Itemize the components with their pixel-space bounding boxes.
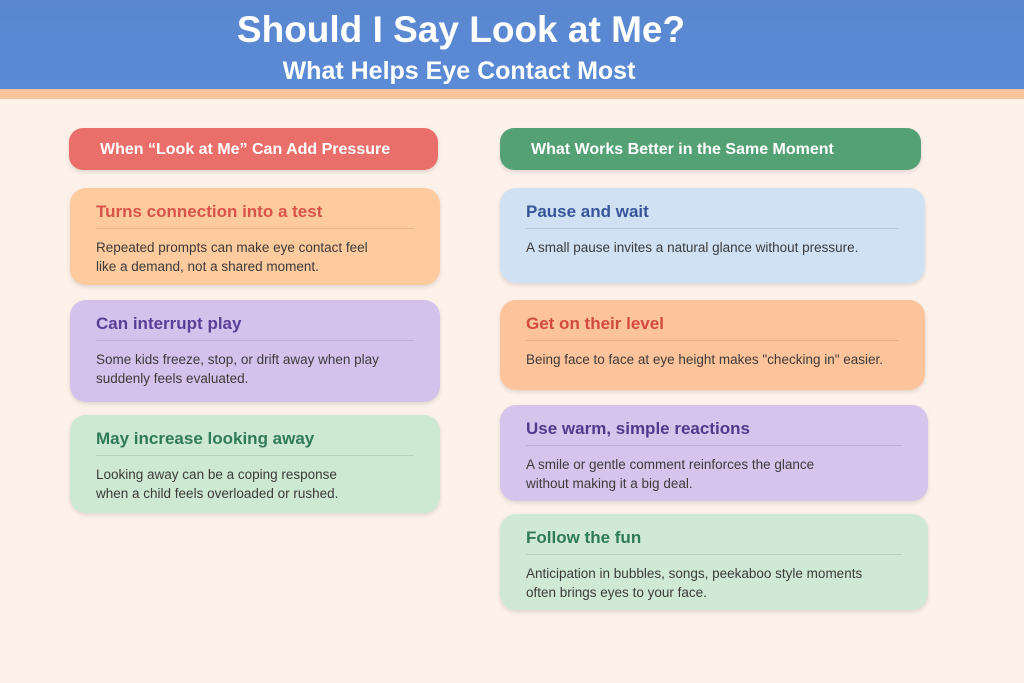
card: warm simple reactions: Use warm, simple reactions: [526, 419, 750, 438]
pill: right heading: What Works Better in the Same Moment: [531, 141, 834, 158]
card: can interrupt play: suddenly feels evaluated.: [96, 371, 248, 386]
card: may increase looking away: May increase looking away: [96, 429, 314, 448]
card: can interrupt play: [70, 300, 440, 402]
card: turns connection into a test: Repeated prompts can make eye contact feel: [96, 240, 368, 255]
card: may increase looking away: [70, 415, 440, 513]
card: pause and wait: Pause and wait: [526, 202, 649, 221]
card: can interrupt play: Some kids freeze, stop, or drift away when play: [96, 352, 379, 367]
card: turns connection into a test: like a demand, not a shared moment.: [96, 259, 319, 274]
card: follow the fun: Anticipation in bubbles, songs, peekaboo style moments: [526, 566, 862, 581]
card: follow the fun: [500, 514, 928, 610]
card: follow the fun: often brings eyes to your face.: [526, 585, 707, 600]
pill: left heading: [69, 128, 438, 170]
card: turns connection into a test: Turns connection into a test: [96, 202, 322, 221]
card: may increase looking away: when a child feels overloaded or rushed.: [96, 486, 338, 501]
pill: right heading: [500, 128, 921, 170]
card: follow the fun: Follow the fun: [526, 528, 641, 547]
card: pause and wait: [500, 188, 925, 283]
subtitle: What Helps Eye Contact Most: [283, 57, 635, 85]
card: get on their level: Get on their level: [526, 314, 664, 333]
card: warm simple reactions: without making it a big deal.: [526, 476, 693, 491]
card: may increase looking away: Looking away can be a coping response: [96, 467, 337, 482]
card: turns connection into a test: [70, 188, 440, 285]
card: get on their level: Being face to face at eye height makes "checking in" easier.: [526, 352, 883, 367]
header band: [0, 0, 1024, 89]
card: can interrupt play: Can interrupt play: [96, 314, 241, 333]
card: pause and wait: A small pause invites a natural glance without pressure.: [526, 240, 858, 255]
pill: left heading: When “Look at Me” Can Add Pressure: [100, 141, 390, 158]
card: warm simple reactions: [500, 405, 928, 501]
card: get on their level: [500, 300, 925, 390]
title: Should I Say Look at Me?: [237, 9, 685, 50]
card: warm simple reactions: A smile or gentle comment reinforces the glance: [526, 457, 814, 472]
